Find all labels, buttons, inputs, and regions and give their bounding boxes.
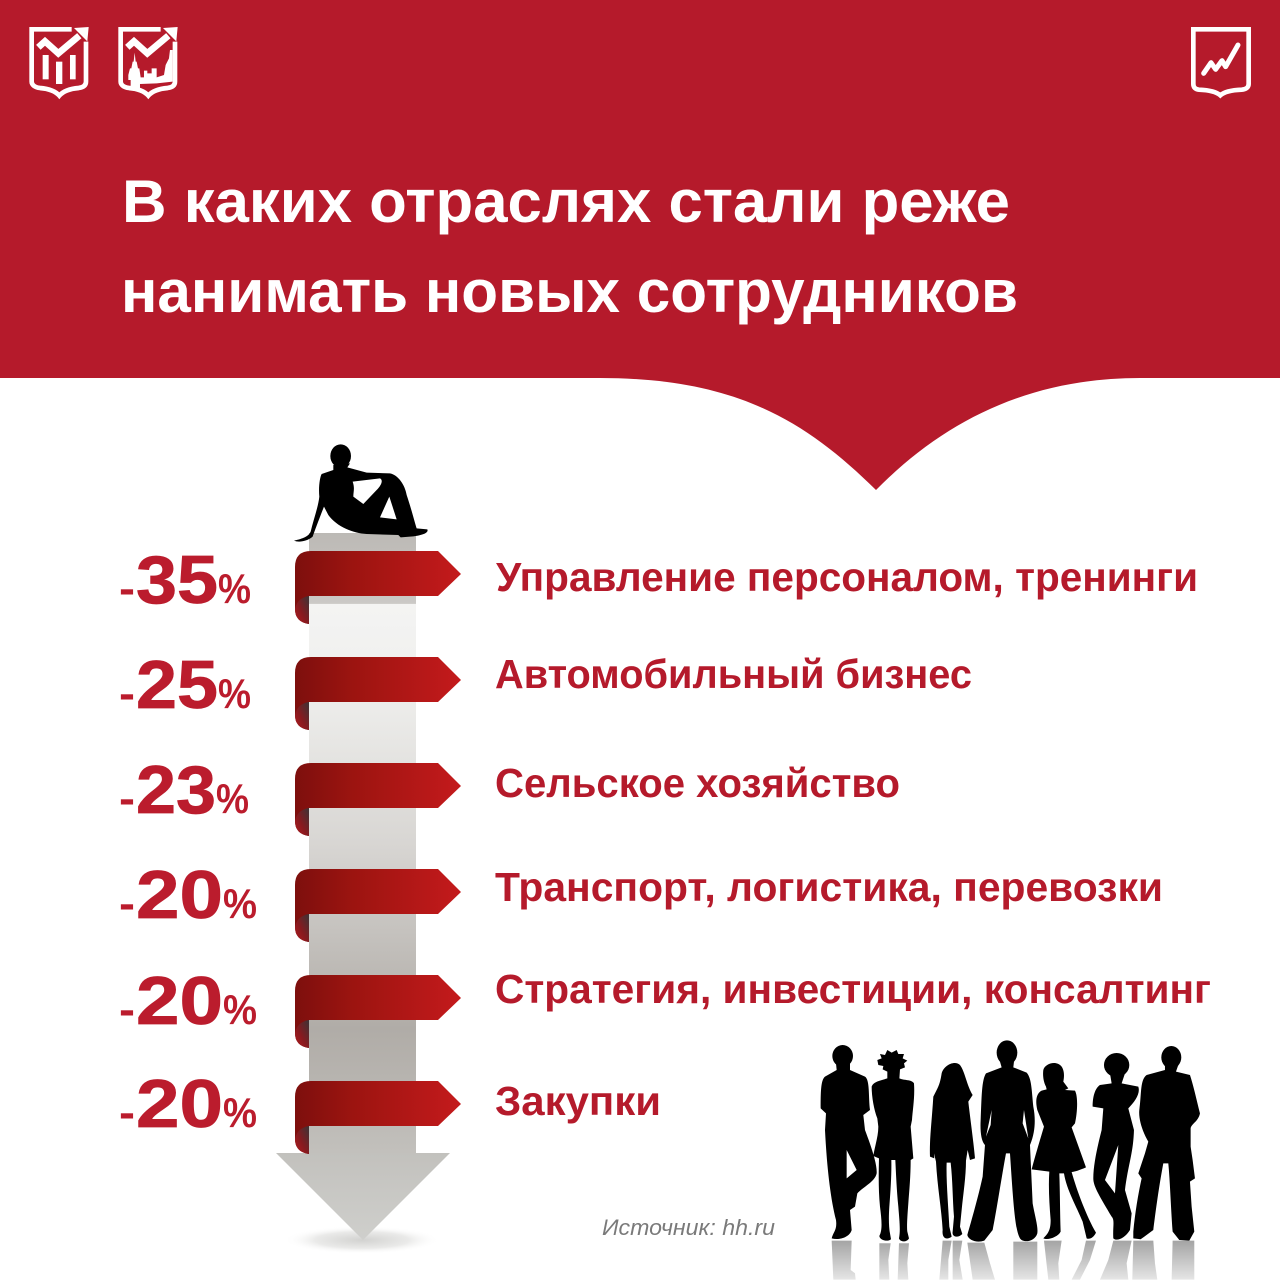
source note: Источник: hh.ru [602, 1215, 775, 1240]
row 2: ribbon, value, label: Автомобильный бизнес [495, 651, 972, 697]
row 1: ribbon, value, label [119, 542, 1198, 624]
seated man silhouette [294, 444, 428, 542]
icon: shield with zigzag growth line [1193, 29, 1249, 95]
row 1: ribbon, value, label: 35 [136, 542, 218, 618]
row 6: ribbon, value, label [119, 1066, 661, 1154]
row 2: ribbon, value, label: - [119, 669, 135, 718]
row 2: ribbon, value, label [119, 647, 972, 730]
row 4: ribbon, value, label [119, 857, 1163, 942]
row 4: ribbon, value, label: 20 [136, 857, 223, 933]
icon: shield with kremlin skyline [121, 27, 178, 96]
red header banner [0, 0, 1280, 490]
title [121, 168, 1018, 325]
row 3: ribbon, value, label: % [216, 775, 249, 822]
row 6: ribbon, value, label: Закупки [495, 1078, 661, 1124]
row 2: ribbon, value, label: 25 [136, 647, 218, 723]
row 6: ribbon, value, label: % [223, 1089, 257, 1136]
group of people silhouettes with reflection [821, 1040, 1200, 1280]
down arrow column [276, 533, 450, 1240]
row 5: ribbon, value, label [119, 963, 1211, 1048]
row 5: ribbon, value, label: - [119, 985, 135, 1034]
row 4: ribbon, value, label: - [119, 879, 135, 928]
row 5: ribbon, value, label: % [223, 986, 257, 1033]
row 2: ribbon, value, label: % [218, 670, 251, 717]
row 4: ribbon, value, label: Транспорт, логистика, перевозки [495, 864, 1163, 910]
row 6: ribbon, value, label: 20 [136, 1066, 223, 1142]
row 6: ribbon, value, label: - [119, 1088, 135, 1137]
row 3: ribbon, value, label: 23 [136, 752, 216, 828]
row 3: ribbon, value, label: Сельское хозяйство [495, 760, 900, 806]
row 5: ribbon, value, label: Стратегия, инвестиции, консалтинг [495, 966, 1211, 1012]
row 1: ribbon, value, label: - [119, 564, 135, 613]
row 3: ribbon, value, label [119, 752, 900, 836]
arrow shadow [284, 1226, 440, 1254]
row 4: ribbon, value, label: % [223, 880, 257, 927]
row 5: ribbon, value, label: 20 [136, 963, 223, 1039]
row 1: ribbon, value, label: % [218, 565, 251, 612]
title: В каких отраслях стали реже [122, 168, 1010, 235]
title: нанимать новых сотрудников [121, 258, 1018, 325]
row 1: ribbon, value, label: Управление персоналом, тренинги [496, 554, 1198, 600]
row 3: ribbon, value, label: - [119, 774, 135, 823]
icon: shield with bar chart [32, 27, 89, 96]
